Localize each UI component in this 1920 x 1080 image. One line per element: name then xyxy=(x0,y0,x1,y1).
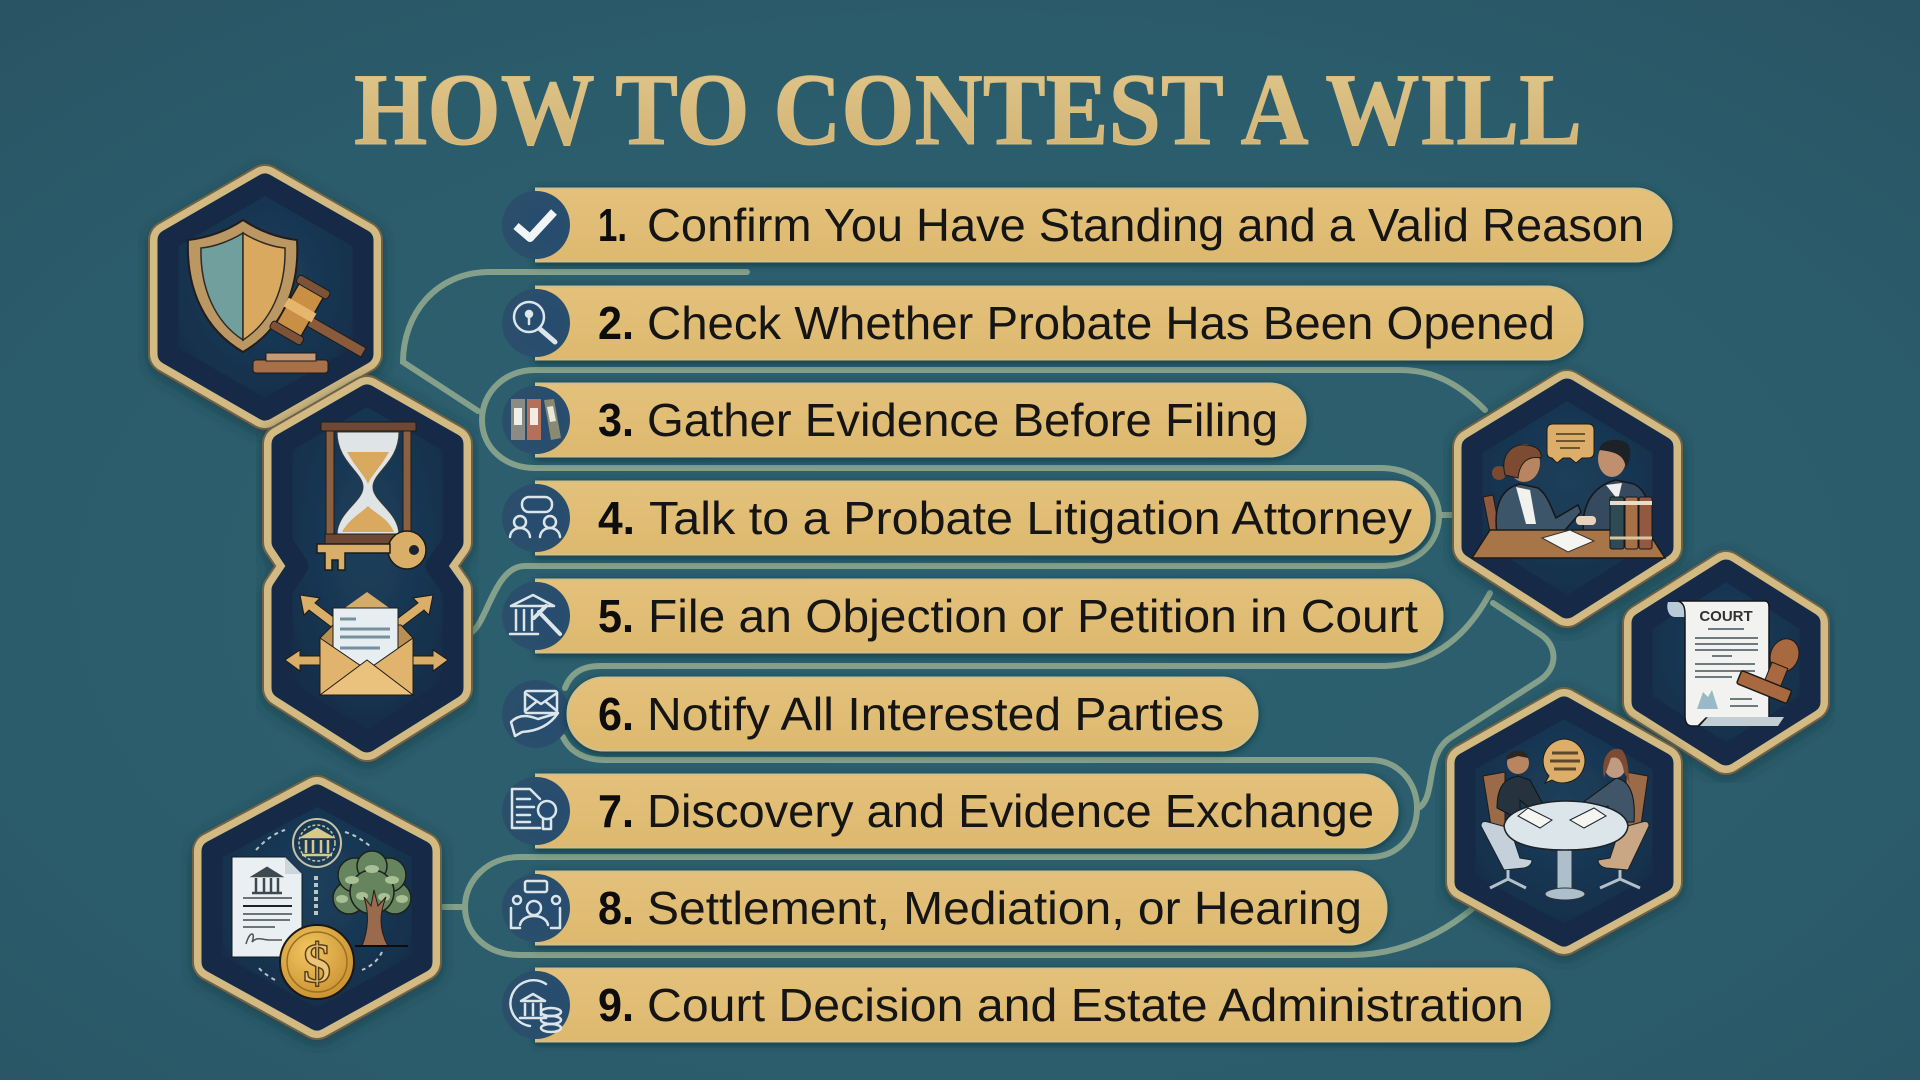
icon: shield xyxy=(188,220,297,352)
step 3 xyxy=(502,384,1306,456)
step 8: Settlement, Mediation, or Hearing xyxy=(647,882,1362,934)
title: HOW TO CONTEST A WILL xyxy=(354,53,1582,167)
hexagon: hourglass and envelope xyxy=(282,395,453,742)
icon: mediation group xyxy=(511,881,560,928)
step 5: 5. xyxy=(598,590,634,642)
icon: tree xyxy=(333,851,411,946)
icon: check mark xyxy=(516,212,554,238)
step 6 xyxy=(502,678,1257,750)
step 3: 3. xyxy=(598,394,634,446)
icon: envelope with arrows xyxy=(285,592,448,695)
icon: envelope in hand xyxy=(511,691,558,736)
step 5 xyxy=(502,580,1442,652)
icon: back chairs xyxy=(1483,772,1648,832)
icon: magnifier xyxy=(514,302,555,342)
icon: courthouse and gavel xyxy=(510,595,560,634)
step 9 xyxy=(502,968,1549,1042)
icon: people talking xyxy=(510,497,560,537)
step 1 xyxy=(502,188,1672,262)
step 6: Notify All Interested Parties xyxy=(647,688,1224,740)
icon: binders xyxy=(511,399,561,440)
icon: hourglass xyxy=(321,422,416,544)
icon: round table xyxy=(1504,801,1628,900)
step 4: Talk to a Probate Litigation Attorney xyxy=(649,492,1412,544)
icon: gavel xyxy=(253,274,366,373)
icon: table and papers xyxy=(1472,516,1665,558)
icon: document and bulb xyxy=(512,789,556,829)
hexagon: mediation table xyxy=(1465,707,1663,936)
icon: court scroll: COURT xyxy=(1699,608,1753,625)
step 8 xyxy=(502,872,1386,944)
hexagon: court document xyxy=(1642,570,1810,755)
hexagon: estate assets xyxy=(212,795,422,1020)
step 7 xyxy=(502,774,1398,848)
icon: key xyxy=(317,531,426,570)
icon: speech bubble xyxy=(1547,424,1594,463)
step 2: Check Whether Probate Has Been Opened xyxy=(647,297,1555,349)
icon: stamp xyxy=(1737,627,1809,704)
hexagon: shield and gavel xyxy=(168,184,366,410)
icon: bank seal xyxy=(293,819,341,867)
icon: woman attorney xyxy=(1483,444,1581,538)
icon: male attorney xyxy=(1583,440,1650,536)
icon: court scroll xyxy=(1667,601,1784,726)
step 9: Court Decision and Estate Administration xyxy=(647,979,1524,1031)
step 6: 6. xyxy=(598,688,634,740)
step 7: 7. xyxy=(598,785,634,837)
step 4: 4. xyxy=(598,492,635,544)
step 1: 1. xyxy=(598,199,627,251)
step 2 xyxy=(502,286,1582,360)
step 9: 9. xyxy=(598,979,634,1031)
icon: front chairs xyxy=(1481,822,1649,888)
step 1: Confirm You Have Standing and a Valid Reason xyxy=(647,199,1644,251)
icon: dollar coin: $ xyxy=(303,933,331,995)
icon: will document xyxy=(232,857,302,957)
step 3: Gather Evidence Before Filing xyxy=(647,394,1278,446)
icon: dashed cycle arrows xyxy=(256,830,382,980)
step 2: 2. xyxy=(598,297,634,349)
step 4 xyxy=(502,482,1430,554)
connector lines xyxy=(403,272,1554,955)
icon: law books xyxy=(1610,497,1652,549)
step 7: Discovery and Evidence Exchange xyxy=(647,785,1374,837)
icon: two mediators xyxy=(1497,749,1634,822)
icon: speech bubble xyxy=(1543,739,1585,783)
step 8: 8. xyxy=(598,882,634,934)
icon: dollar coin xyxy=(280,925,354,999)
step 5: File an Objection or Petition in Court xyxy=(648,590,1418,642)
icon: court and coins xyxy=(510,980,561,1032)
hexagon: attorney consultation xyxy=(1472,389,1665,608)
